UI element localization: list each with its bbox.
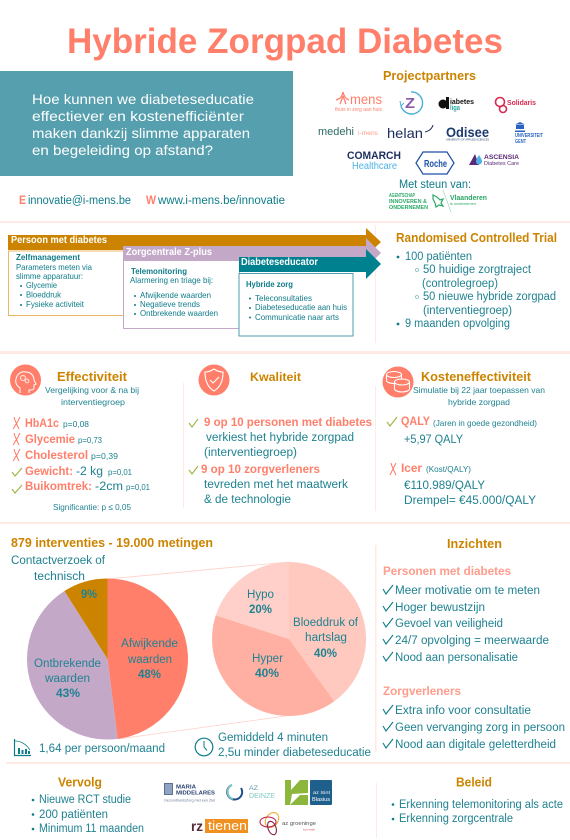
subtitle xyxy=(45,385,139,407)
insights: care providers xyxy=(383,705,565,751)
heading: interventies: 879 interventies - 19.000 metingen xyxy=(11,536,213,550)
logo: Ascensia: Diabetes Care xyxy=(484,161,519,167)
arrow: zorgcentrale Z-plus xyxy=(123,238,381,268)
box: telemonitoring: Telemonitoring xyxy=(131,266,187,276)
panel: research question: Hoe kunnen we diabeteseducatie xyxy=(32,91,254,107)
quality results: 9 op 10 personen met diabetes xyxy=(204,417,372,429)
icon: head xyxy=(10,364,41,396)
results list: -2cm xyxy=(95,481,123,493)
logo: Comarch Healthcare xyxy=(347,150,401,172)
logo: diabetes liga: liga xyxy=(450,105,460,112)
statistic: duur xyxy=(195,732,371,759)
cost results: QALY xyxy=(401,416,430,428)
results list: p=0,73 xyxy=(78,435,102,445)
insights: patients: Hoger bewustzijn xyxy=(395,602,485,614)
box: hybride zorg: Diabeteseducatie aan huis xyxy=(255,302,347,312)
subheading: zorgverleners: Zorgverleners xyxy=(383,686,461,698)
icon: shield xyxy=(198,364,230,396)
logo: Universiteit Gent: UNIVERSITEIT xyxy=(515,133,543,139)
logo: AZ Sint-Blasius: Blasius xyxy=(312,797,330,803)
subtitle: Vergelijking voor & na bij xyxy=(45,385,139,395)
logo: AZ Deinze xyxy=(227,785,275,800)
panel: beleid: Erkenning zorgcentrale xyxy=(399,813,513,825)
sponsors xyxy=(389,179,487,212)
box: zelfmanagement: Fysieke activiteit xyxy=(26,299,85,309)
panel: randomised controlled trial: 100 patiënten xyxy=(405,251,472,263)
logo: Z-plus: Z xyxy=(405,95,415,112)
statistic: duur: 2,5u minder diabeteseducatie xyxy=(218,747,371,759)
logo: AZ Groeninge xyxy=(260,810,316,836)
title: Hybride Zorgpad Diabetes xyxy=(67,22,503,61)
pie chart: afwijkende waarden: hartslag xyxy=(305,632,347,644)
results list: p=0,01 xyxy=(126,482,150,492)
insights: patients: 24/7 opvolging = meerwaarde xyxy=(395,635,549,647)
results list: p=0,01 xyxy=(108,467,132,477)
heading: effectiviteit: Effectiviteit xyxy=(57,370,128,384)
significance note: Significantie: p ≤ 0,05 xyxy=(53,502,131,512)
insights: patients xyxy=(383,585,549,664)
panel: vervolg: Nieuwe RCT studie xyxy=(39,794,131,806)
logo: Universiteit Gent: GENT xyxy=(515,139,526,145)
contact details xyxy=(19,195,285,207)
results list: Glycemie xyxy=(25,434,75,446)
statistic: per persoon: 1,64 per persoon/maand xyxy=(39,743,165,755)
panel: kwaliteit xyxy=(189,364,372,506)
logo: RZ Tienen: rz xyxy=(191,818,203,834)
pie chart: interventies: 48% xyxy=(138,669,161,681)
insights: care providers: Geen vervanging zorg in persoon xyxy=(395,722,565,734)
logo: helan: helan xyxy=(387,125,423,141)
heading: kosteneffectiviteit: Kosteneffectiviteit xyxy=(421,370,532,384)
logo: diabetes liga: iabetes xyxy=(450,99,474,106)
subtitle: Simulatie bij 22 jaar toepassen van xyxy=(413,385,545,395)
logo: Odisee: UNIVERSITY OF APPLIED SCIENCES xyxy=(446,138,489,142)
sponsors: is ondernemen xyxy=(450,202,476,206)
heading: project partners: Projectpartners xyxy=(383,69,476,83)
panel: research question: effectiever en kostenefficiënter xyxy=(32,108,244,124)
pie chart: interventies: Ontbrekende xyxy=(34,658,101,670)
box: zelfmanagement: Bloeddruk xyxy=(26,290,62,300)
panel: randomised controlled trial: (interventiegroep) xyxy=(423,305,512,317)
box: hybride zorg: Communicatie naar arts xyxy=(255,312,339,322)
sponsors: AGENTSCHAP xyxy=(389,193,415,199)
logo: diabetes liga xyxy=(438,97,474,112)
statistic: per persoon xyxy=(14,739,165,756)
logo: Solidaris xyxy=(496,98,536,112)
results list: -2 kg xyxy=(76,466,103,478)
logo: i-mens: mens xyxy=(350,91,382,107)
contact details: E xyxy=(19,195,26,207)
box: zelfmanagement xyxy=(8,251,124,316)
sponsors: Vlaanderen xyxy=(450,195,487,202)
panel: vervolg xyxy=(32,776,144,835)
pie chart: afwijkende waarden: Bloeddruk of xyxy=(293,617,359,629)
insights: care providers: Nood aan digitale geletterdheid xyxy=(395,739,556,751)
process diagram xyxy=(8,228,381,336)
cost results: €110.989/QALY xyxy=(404,480,485,492)
panel: research question: maken dankzij slimme apparaten xyxy=(32,125,250,141)
arrow: diabeteseducator xyxy=(239,249,381,279)
box: telemonitoring: Ontbrekende waarden xyxy=(140,308,218,318)
panel: research question xyxy=(0,71,293,176)
results list: Cholesterol xyxy=(25,450,88,462)
logo: Roche: Roche xyxy=(424,159,447,170)
box: zelfmanagement: Zelfmanagement xyxy=(16,252,80,262)
results list: HbA1c xyxy=(25,418,60,430)
box: telemonitoring: Afwijkende waarden xyxy=(140,290,211,300)
subtitle xyxy=(413,385,545,407)
results list xyxy=(12,417,150,493)
panel: randomised controlled trial: Randomised Controlled Trial xyxy=(396,231,557,245)
pie chart: interventies xyxy=(11,555,188,739)
cost results: Drempel= €45.000/QALY xyxy=(404,495,536,507)
statistic: duur: Gemiddeld 4 minuten xyxy=(218,732,328,744)
logo: Roche xyxy=(416,152,454,174)
panel: randomised controlled trial: 50 huidige zorgtraject xyxy=(423,264,532,276)
quality results: verkiest het hybride zorgpad xyxy=(206,432,354,444)
logo: Solidaris: Solidaris xyxy=(507,98,536,107)
arrow: diabeteseducator: Diabeteseducator xyxy=(241,257,318,268)
quality results: 9 op 10 zorgverleners xyxy=(201,464,320,476)
cost results: (Kost/QALY) xyxy=(426,464,471,474)
panel: randomised controlled trial: 50 nieuwe hybride zorgpad xyxy=(423,291,556,303)
pie chart: interventies: 43% xyxy=(56,688,80,700)
box: telemonitoring xyxy=(124,260,240,328)
logo: Comarch Healthcare: COMARCH xyxy=(347,150,401,162)
sponsors: INNOVEREN & xyxy=(389,199,427,205)
pie chart: interventies: 9% xyxy=(81,589,97,601)
panel: project partners xyxy=(318,69,543,212)
sponsors: ONDERNEMEN xyxy=(389,205,428,211)
hospital logos xyxy=(164,780,332,836)
subheading: personen met diabetes: Personen met diabetes xyxy=(383,566,511,578)
logo: RZ Tienen xyxy=(191,818,248,834)
logo: Ascensia xyxy=(469,154,520,167)
results list: p=0,39 xyxy=(91,451,118,461)
quality results: tevreden met het maatwerk xyxy=(204,479,348,491)
panel: beleid xyxy=(392,776,563,825)
logo: medehi: i-mens xyxy=(358,131,378,137)
cost results: Icer xyxy=(401,463,423,475)
pie chart: afwijkende waarden: 40% xyxy=(314,648,337,660)
pie chart: afwijkende waarden: Hyper xyxy=(252,653,283,665)
connector lines xyxy=(108,562,289,739)
insights: patients: Gevoel van veiligheid xyxy=(395,618,503,630)
quality results xyxy=(189,417,372,506)
cost results xyxy=(387,416,537,507)
pie chart: afwijkende waarden: Hypo xyxy=(247,589,274,601)
results list: Buikomtrek: xyxy=(25,481,92,493)
box: zelfmanagement: Parameters meten via xyxy=(16,262,92,272)
logo: AZ Groeninge: kortrijk xyxy=(303,828,316,832)
cost results: (Jaren in goede gezondheid) xyxy=(433,418,537,428)
insights: care providers: Extra info voor consultatie xyxy=(395,705,531,717)
panel: research question: en begeleiding op afstand? xyxy=(32,142,213,158)
logo: Comarch Healthcare: Healthcare xyxy=(352,161,397,172)
box: zelfmanagement: slimme apparatuur: xyxy=(16,271,83,281)
logo: medehi xyxy=(318,126,378,138)
box: telemonitoring: Alarmering en triage bij: xyxy=(130,275,213,285)
subtitle: interventiegroep xyxy=(61,397,125,407)
logo: Universiteit Gent xyxy=(515,122,543,145)
panel: inzichten xyxy=(383,537,565,751)
panel: randomised controlled trial xyxy=(396,231,557,330)
insights: patients: Nood aan personalisatie xyxy=(395,652,518,664)
panel: randomised controlled trial: 9 maanden opvolging xyxy=(405,318,510,330)
logo: Maria Middelares: GezondheidsZorg met een Ziel xyxy=(164,798,215,802)
logo: Maria Middelares: MARIA xyxy=(176,784,196,790)
quality results: & de technologie xyxy=(204,494,291,506)
cost results: +5,97 QALY xyxy=(404,434,463,446)
sponsors: Met steun van: xyxy=(399,179,471,191)
box: zelfmanagement: Glycemie xyxy=(26,280,57,290)
logo: Odisee: Odisee xyxy=(446,124,489,140)
heading: inzichten: Inzichten xyxy=(447,537,502,551)
logo: AZ Deinze: DEINZE xyxy=(249,793,275,800)
panel: randomised controlled trial: (controlegroep) xyxy=(422,278,498,290)
arrow: persoon met diabetes xyxy=(8,228,381,256)
box: hybride zorg xyxy=(239,274,353,336)
pie chart: interventies: waarden xyxy=(127,654,172,666)
box: hybride zorg: Teleconsultaties xyxy=(255,293,312,303)
logo: Ascensia: ASCENSIA xyxy=(484,155,520,161)
pie chart: afwijkende waarden xyxy=(212,562,366,716)
logo: Z-plus xyxy=(400,92,423,114)
logo: i-mens: thuis in zorg aan huis xyxy=(335,107,382,113)
subtitle: hybride zorgpad xyxy=(448,397,510,407)
logo: Maria Middelares xyxy=(164,784,215,802)
box: telemonitoring: Negatieve trends xyxy=(140,299,200,309)
contact details: www.i-mens.be/innovatie xyxy=(157,195,285,207)
arrow: zorgcentrale Z-plus: Zorgcentrale Z-plus xyxy=(126,247,212,258)
logo: RZ Tienen: tienen xyxy=(208,818,247,833)
panel: vervolg: 200 patiënten xyxy=(39,809,108,821)
panel: vervolg: Minimum 11 maanden xyxy=(39,823,144,835)
logo: AZ Groeninge: az groeninge xyxy=(282,821,316,827)
panel: effectiviteit xyxy=(10,364,150,512)
results list: Gewicht: xyxy=(25,466,73,478)
panel: kosteneffectiviteit xyxy=(382,366,545,507)
pie chart: afwijkende waarden: 40% xyxy=(255,668,279,680)
panel: beleid: Erkenning telemonitoring als acte xyxy=(399,799,563,811)
box: hybride zorg: Hybride zorg xyxy=(246,279,293,289)
heading: kwaliteit: Kwaliteit xyxy=(250,372,301,384)
logo: AZ Sint-Blasius xyxy=(285,780,332,805)
pie chart: interventies: Contactverzoek of xyxy=(11,555,106,567)
pie chart: interventies: Afwijkende xyxy=(121,638,178,650)
arrow: persoon met diabetes: Persoon met diabetes xyxy=(11,235,107,246)
logo: AZ Sint-Blasius: az Sint xyxy=(313,790,331,795)
pie chart: interventies: technisch xyxy=(34,571,85,583)
insights: patients: Meer motivatie om te meten xyxy=(395,585,540,597)
pie chart: afwijkende waarden: 20% xyxy=(249,604,272,616)
logo: i-mens xyxy=(335,91,382,113)
contact details: W xyxy=(146,195,156,207)
panel: beleid: Beleid xyxy=(456,776,492,790)
logo: Maria Middelares: MIDDELARES xyxy=(176,790,215,796)
contact details: innovatie@i-mens.be xyxy=(28,195,131,207)
quality results: (interventiegroep) xyxy=(204,447,297,459)
icon: coins xyxy=(382,366,414,398)
panel: vervolg: Vervolg xyxy=(58,776,102,790)
logo: AZ Deinze: AZ xyxy=(249,785,258,792)
pie chart: interventies: waarden xyxy=(44,673,90,685)
logo: medehi: medehi xyxy=(318,126,354,138)
results list: p=0,08 xyxy=(63,419,89,429)
